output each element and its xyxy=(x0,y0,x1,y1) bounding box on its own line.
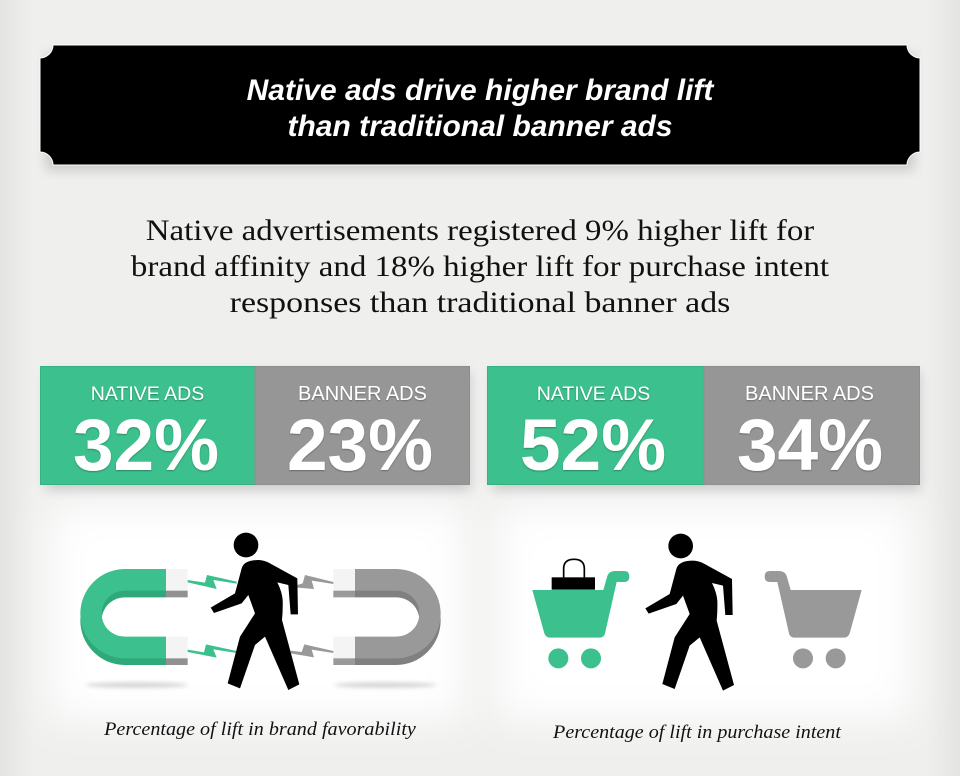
banner ads 34%: BANNER ADS xyxy=(745,383,874,405)
native ads 52%: NATIVE ADS xyxy=(537,383,650,405)
icon: grey cart xyxy=(765,571,862,668)
caption: purchase intent: Percentage of lift in purchase intent xyxy=(552,723,842,743)
native ads 52% xyxy=(488,366,704,486)
banner ads 23% xyxy=(255,366,470,486)
intro paragraph xyxy=(131,213,829,319)
icon: green sparks xyxy=(188,575,237,658)
panel: brand favorability stats xyxy=(40,366,470,490)
banner ads 34% xyxy=(704,366,920,486)
banner ads 23%: 23% xyxy=(287,405,433,486)
title text: than traditional banner ads xyxy=(287,110,673,143)
intro paragraph: responses than traditional banner ads xyxy=(230,285,730,319)
illustration: magnets attracting a walking person xyxy=(80,533,441,690)
native ads 52%: 52% xyxy=(520,405,666,486)
icon: walking person xyxy=(211,533,299,690)
native ads 32%: NATIVE ADS xyxy=(91,383,204,405)
banner ads 23%: BANNER ADS xyxy=(298,383,427,405)
icon: green magnet xyxy=(80,569,188,665)
icon: walking person xyxy=(645,534,734,691)
intro paragraph: brand affinity and 18% higher lift for purchase intent xyxy=(131,249,829,283)
native ads 32% xyxy=(40,366,255,486)
title plate xyxy=(40,45,920,170)
icon: green cart with bag xyxy=(532,559,629,668)
title text: Native ads drive higher brand lift xyxy=(247,74,715,107)
icon: grey magnet xyxy=(333,569,441,665)
icon: grey sparks xyxy=(291,575,333,657)
plate shape xyxy=(40,45,920,165)
panel: purchase intent stats xyxy=(488,366,920,490)
intro paragraph: Native advertisements registered 9% higher lift for xyxy=(146,213,815,247)
banner ads 34%: 34% xyxy=(737,405,883,486)
native ads 32%: 32% xyxy=(73,405,219,486)
caption: brand favorability: Percentage of lift in brand favorability xyxy=(103,720,416,740)
illustration: shopping carts and walking person xyxy=(532,534,862,691)
